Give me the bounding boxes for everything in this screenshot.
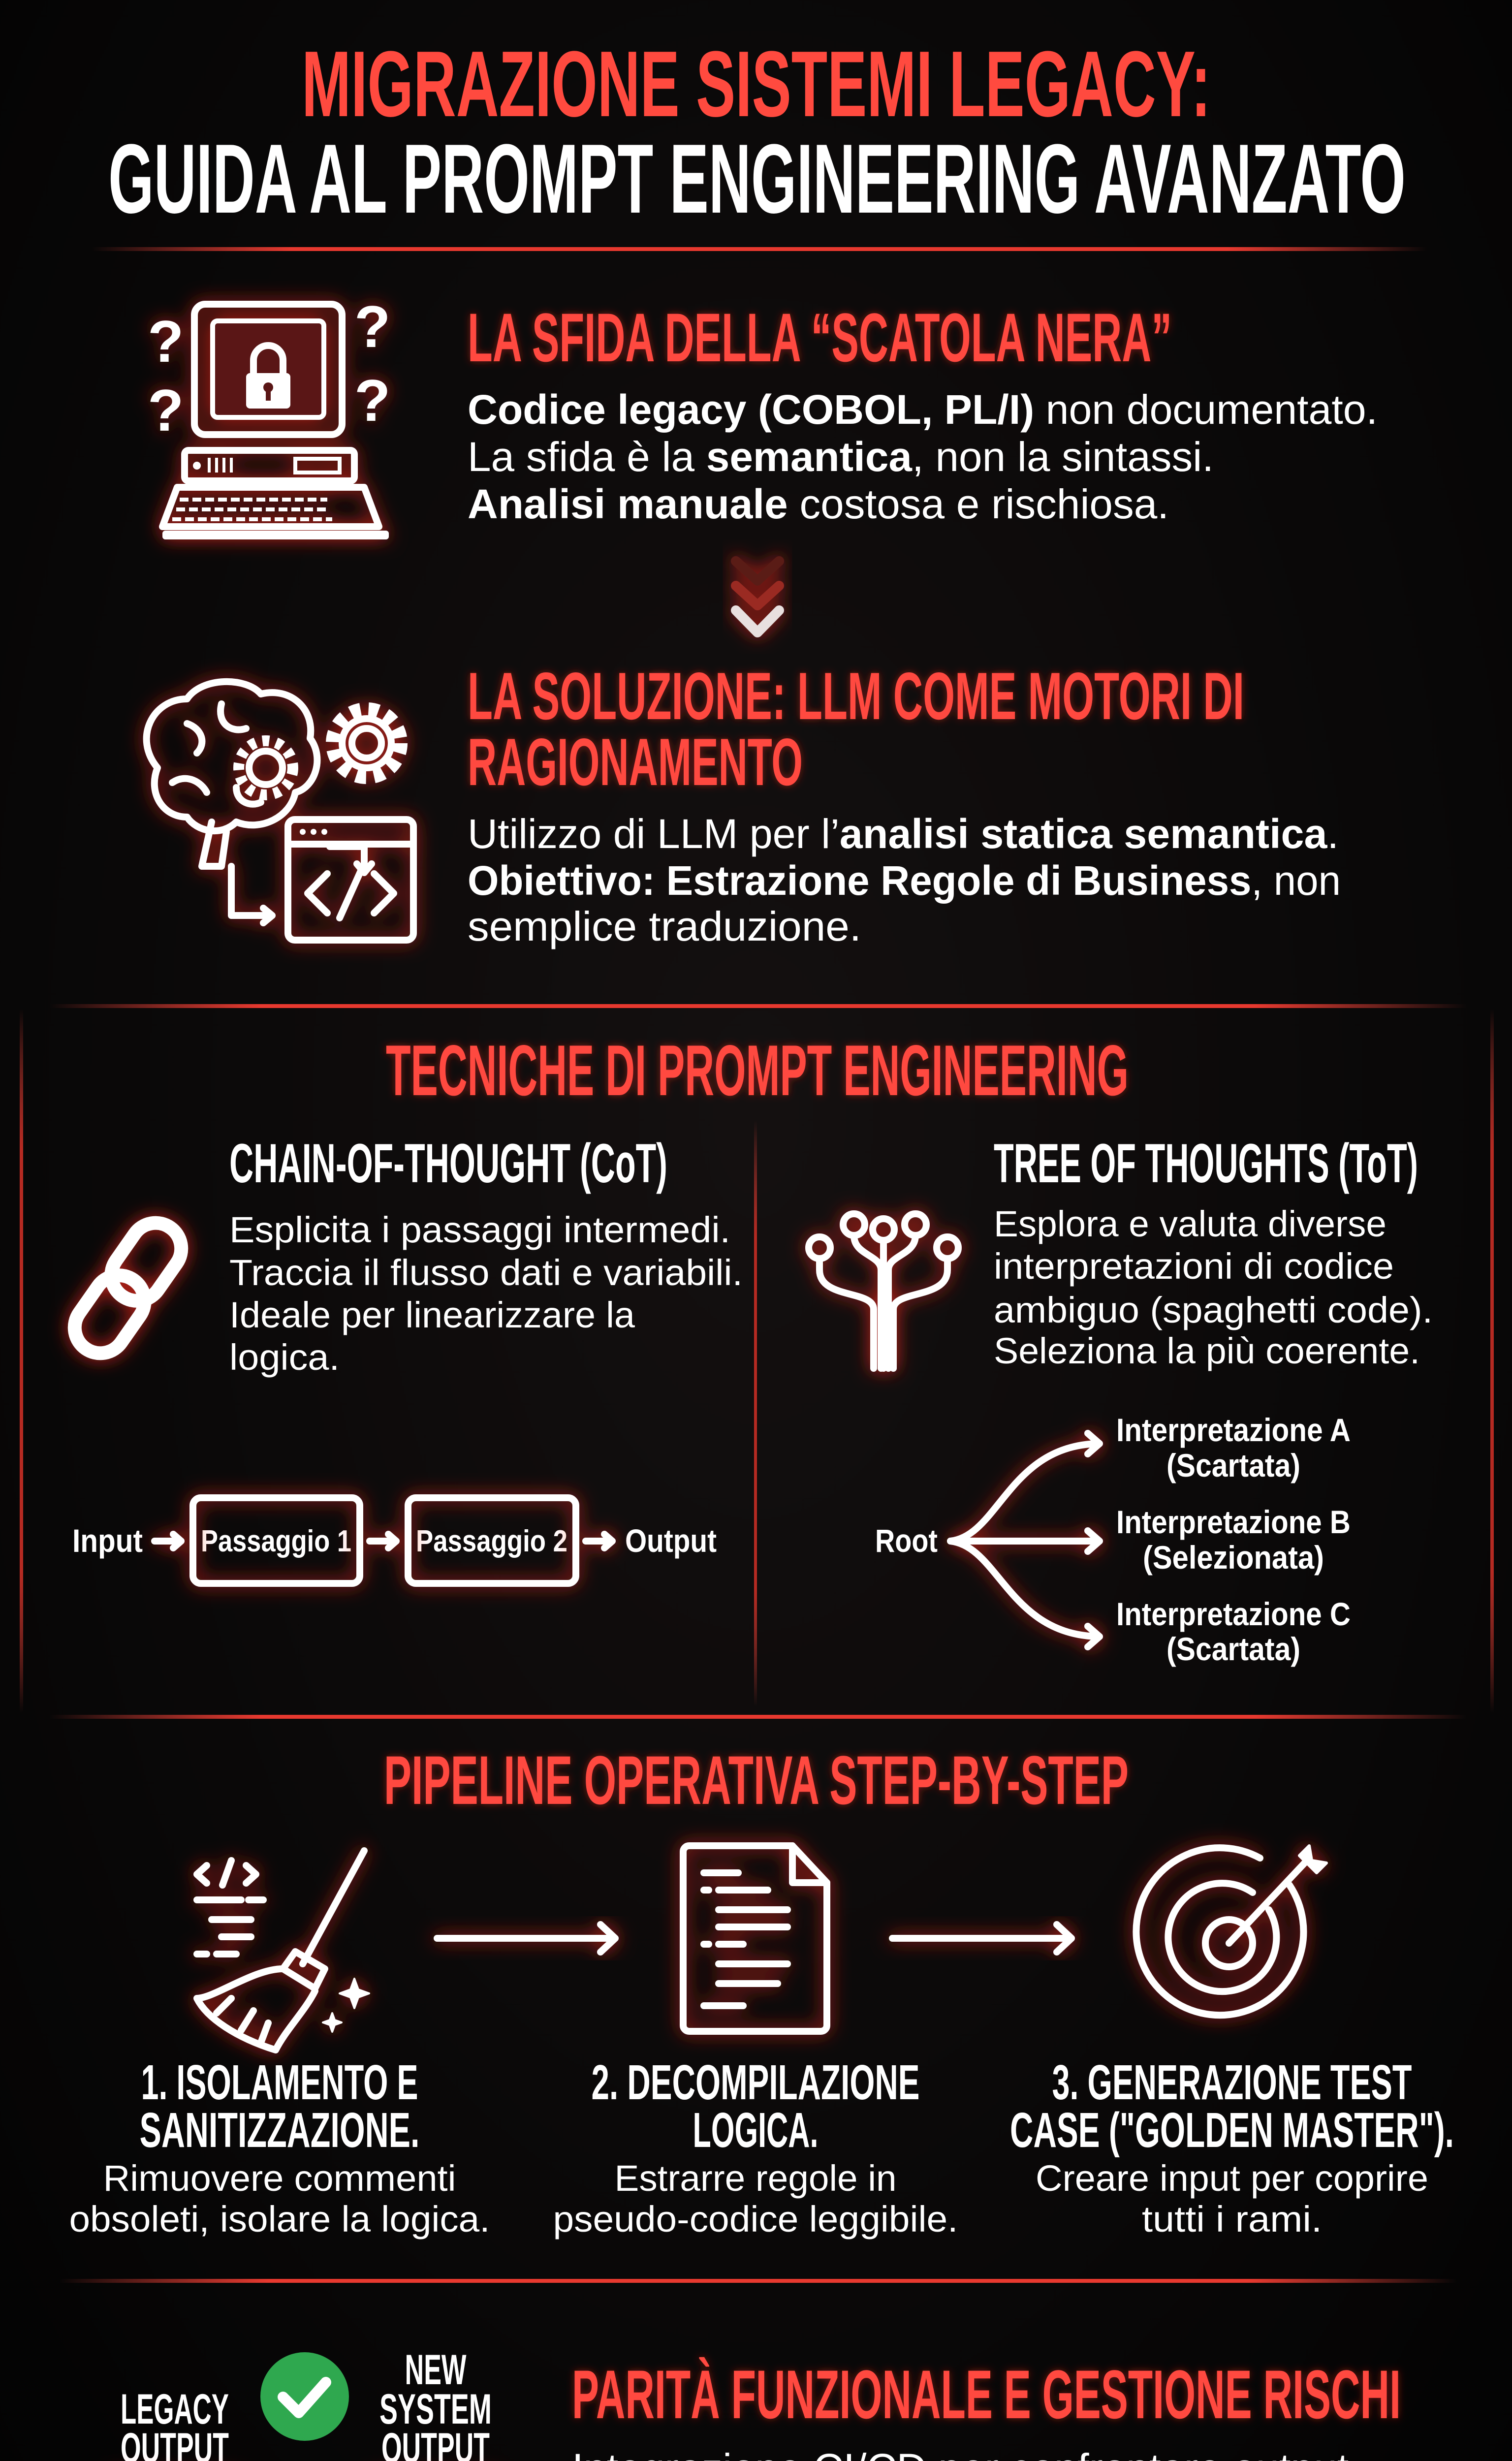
text block: sfida: La sfida è la semantica, non la sintassi.	[468, 434, 1214, 480]
icon: legacy computer with lock: ?	[148, 309, 184, 375]
chart: cot flow	[72, 1498, 717, 1583]
icon: brain gears code	[147, 682, 413, 940]
arrow: step1 to step2	[437, 1925, 615, 1952]
chart: tot tree: (Scartata)	[1166, 1447, 1300, 1483]
text block: step 2: Estrarre regole in	[614, 2158, 897, 2199]
text block: step 2: pseudo-codice leggibile.	[553, 2199, 958, 2240]
text block: cot: logica.	[229, 1337, 340, 1378]
arrow: step2 to step3	[892, 1925, 1071, 1952]
text block: soluzione	[468, 811, 1341, 949]
panel: tecniche	[20, 1009, 1494, 1713]
text block: soluzione: semplice traduzione.	[468, 903, 861, 949]
text block: sfida: Analisi manuale costosa e rischiosa.	[468, 481, 1169, 527]
icon: balance scale: NEW	[405, 2346, 467, 2394]
text block: step 2	[553, 2055, 958, 2240]
text block: sfida: Codice legacy (COBOL, PL/I) non documentato.	[468, 386, 1378, 433]
icon: legacy computer with lock: ?	[354, 294, 390, 360]
chart: cot flow: Passaggio 1	[201, 1524, 351, 1558]
text block: tot: Seleziona la più coerente.	[994, 1330, 1420, 1371]
text block: cot: Traccia il flusso dati e variabili.	[229, 1252, 743, 1293]
icon: legacy computer with lock: ?	[354, 368, 390, 434]
text block: step 3	[1010, 2055, 1454, 2240]
text block: tot: Esplora e valuta diverse	[994, 1203, 1386, 1244]
text block: sfida	[468, 386, 1378, 527]
text block: step 1: 1. ISOLAMENTO E	[141, 2055, 418, 2110]
chart: cot flow: Output	[625, 1522, 717, 1559]
chart: tot tree: (Selezionata)	[1143, 1539, 1324, 1576]
icon: target	[1136, 1846, 1326, 2015]
chart: cot flow: Input	[72, 1522, 143, 1559]
title	[108, 32, 1406, 234]
chart: tot tree	[875, 1412, 1351, 1667]
icon: legacy computer with lock: ?	[148, 378, 184, 443]
icon: balance scale: SYSTEM	[379, 2386, 492, 2433]
chart: tot tree: Root	[875, 1522, 938, 1559]
heading: la soluzione: RAGIONAMENTO	[468, 725, 803, 799]
text block: soluzione: Obiettivo: Estrazione Regole di Business, non	[468, 857, 1341, 904]
text block: step 2: LOGICA.	[693, 2103, 818, 2158]
icon: legacy computer with lock	[148, 294, 390, 539]
text block: step 1: SANITIZZAZIONE.	[140, 2103, 419, 2158]
icon: document	[683, 1846, 827, 2031]
chart: tot tree: Interpretazione B	[1116, 1504, 1351, 1540]
chart: tot tree: Interpretazione C	[1116, 1596, 1351, 1632]
text block: tot: interpretazioni di codice	[994, 1246, 1394, 1287]
icon: broom	[197, 1851, 369, 2050]
icon: balance scale: LEGACY	[121, 2386, 229, 2433]
text block: step 2: 2. DECOMPILAZIONE	[592, 2055, 919, 2110]
text block: step 1: Rimuovere commenti	[103, 2158, 456, 2199]
icon: balance scale	[112, 2346, 498, 2461]
text block: step 3: tutti i rami.	[1142, 2199, 1322, 2240]
text block: step 1: obsoleti, isolare la logica.	[69, 2199, 490, 2240]
chart: tot tree: (Scartata)	[1166, 1631, 1300, 1667]
icon: chain	[64, 1213, 191, 1363]
text block: soluzione: Utilizzo di LLM per l’analisi statica semantica.	[468, 811, 1339, 857]
text block: cot: Esplicita i passaggi intermedi.	[229, 1209, 730, 1250]
text block: step 1	[69, 2055, 490, 2240]
text block: cot	[229, 1209, 743, 1378]
text block: step 3: Creare input per coprire	[1036, 2158, 1428, 2199]
chart: cot flow: Passaggio 2	[416, 1524, 567, 1558]
text block: tot	[994, 1203, 1433, 1371]
icon: down chevrons	[736, 561, 779, 632]
chart: tot tree: Interpretazione A	[1116, 1412, 1351, 1448]
text block: tot: ambiguo (spaghetti code).	[994, 1290, 1433, 1330]
icon: tree	[809, 1214, 958, 1368]
heading: la soluzione	[468, 659, 1244, 799]
text block: cot: Ideale per linearizzare la	[229, 1294, 635, 1335]
heading: cot: CHAIN-OF-THOUGHT (CoT)	[229, 1133, 667, 1194]
